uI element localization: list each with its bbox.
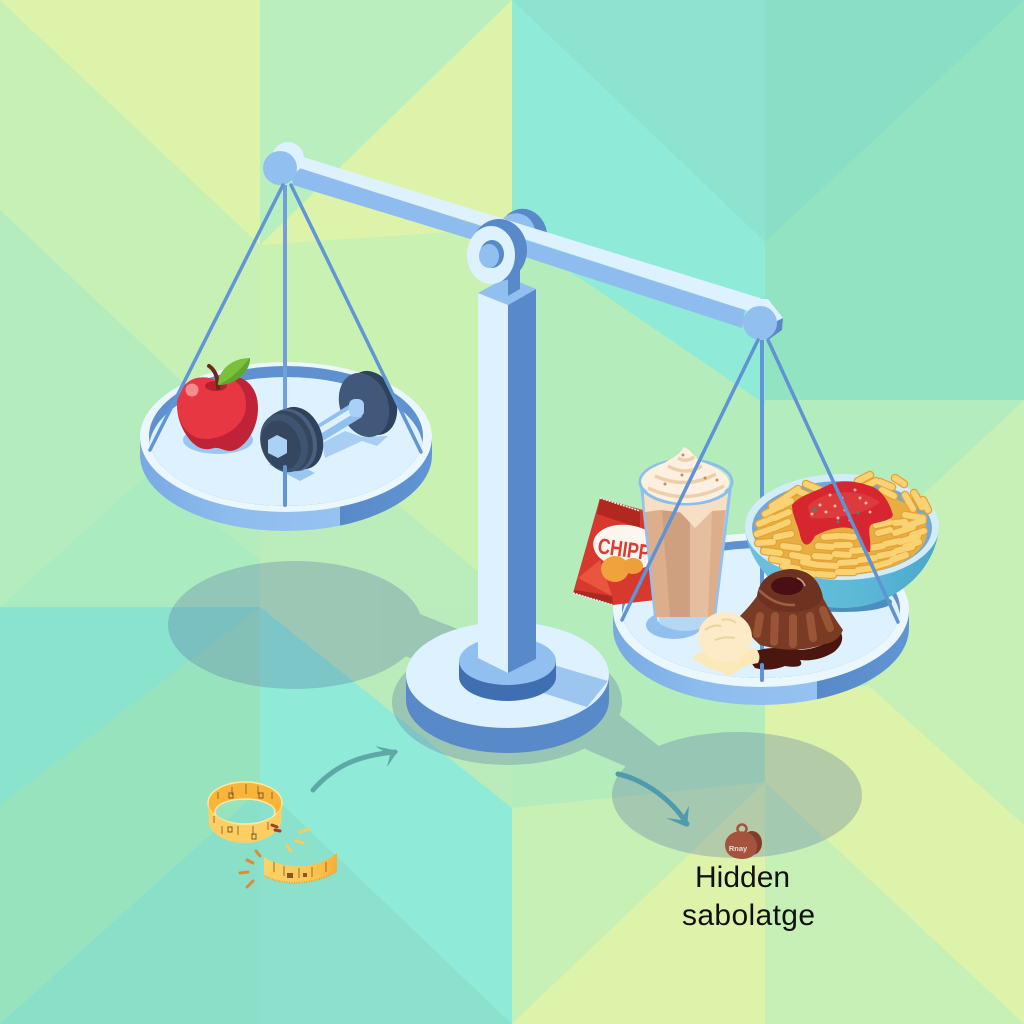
- hinge rear ring: [498, 209, 547, 238]
- tape fragment: [264, 853, 337, 883]
- tape loop: [208, 782, 282, 843]
- icon: milkshake glass: [640, 447, 732, 639]
- arrow: shadow to weight: [618, 774, 689, 827]
- icon: ice cream scoop: [693, 612, 759, 676]
- left pan centre wire: [283, 185, 287, 505]
- caption: hidden sabotage: Hidden: [695, 861, 790, 894]
- icon: broken tape measure: [208, 782, 337, 887]
- caption: hidden sabotage: sabolatge: [682, 899, 815, 932]
- arrow: tape to base: [313, 746, 398, 790]
- icon: apple: [177, 358, 258, 454]
- balance beam: [263, 142, 783, 340]
- chips label: CHIPPS: [596, 533, 663, 567]
- tape sparks: [240, 829, 309, 887]
- scale base: [406, 622, 609, 753]
- right pan centre wire: [760, 340, 764, 680]
- icon: pasta bowl: [745, 474, 939, 612]
- icon: hidden weight: [725, 824, 762, 859]
- pasta pieces: [757, 475, 928, 575]
- right pan wires, front: [622, 340, 898, 680]
- icon: dumbbell: [252, 364, 406, 481]
- right pan: [613, 533, 909, 705]
- left pan wires, front: [150, 185, 421, 505]
- tomato sauce: [792, 482, 893, 552]
- icon: chips bag: [573, 498, 664, 605]
- left pan: [140, 362, 432, 531]
- cast shadows on the ground: [168, 561, 862, 858]
- caption: hidden sabotage: [682, 861, 815, 932]
- weight label: Rnay: [729, 844, 748, 853]
- hinge front ring: [467, 219, 527, 284]
- scale column: [478, 270, 536, 673]
- icon: chocolate lava cake: [740, 569, 843, 670]
